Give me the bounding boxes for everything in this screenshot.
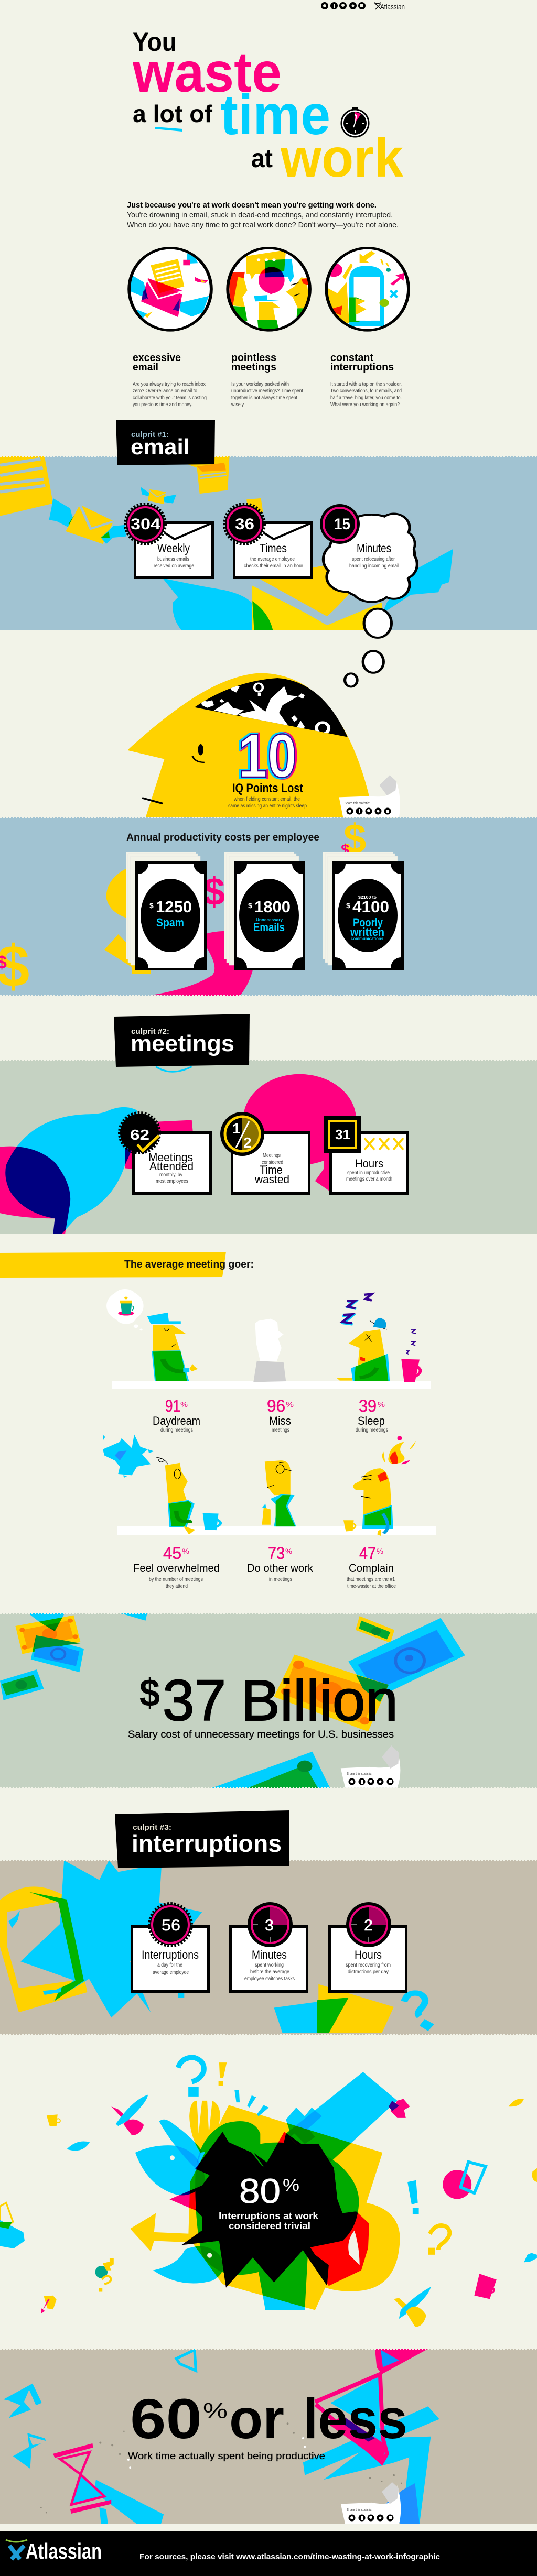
big number 10: 10 [239, 722, 297, 791]
card: half of meetings time wasted: wasted [254, 1173, 289, 1186]
card: 3 minutes: 3 [265, 1917, 274, 1934]
banner: the average meeting goer: The average meeting goer: [124, 1259, 254, 1270]
card: half of meetings time wasted [220, 1112, 309, 1194]
big number: 60 percent or less [130, 2387, 407, 2450]
illustration: 80 percent interruption explosion [0, 2057, 537, 2327]
card: 62 meetings attended: Attended [149, 1160, 194, 1173]
column: constant interruptions: What were you working on again? [330, 402, 400, 408]
stat: 47 percent complain [347, 1544, 396, 1589]
bill stack: $1250 spam: Spam [156, 916, 184, 929]
card: 36 times [224, 504, 312, 577]
stat: 73 percent do other work: 73 [268, 1544, 285, 1563]
character: overwhelmed [103, 1435, 220, 1535]
bill stack: $1800 emails: Unnecessary [256, 918, 283, 922]
stat: 96 percent miss: Miss [269, 1414, 291, 1427]
card: 56 interruptions: a day for the [157, 1962, 182, 1968]
callout: 80 percent: Interruptions at work [219, 2211, 319, 2221]
bill stack: $1800 emails: Emails [253, 921, 285, 934]
card: half of meetings time wasted: 2 [243, 1134, 252, 1151]
callout: 80 percent: 80 [239, 2171, 281, 2210]
card: 3 minutes: employee switches tasks [244, 1976, 295, 1982]
stat: 91 percent daydream: during meetings [160, 1427, 193, 1433]
illustration: flying envelopes [0, 456, 453, 630]
bill stack: $4100 poorly written: 4100 [352, 898, 389, 916]
title: waste [132, 40, 282, 104]
card: half of meetings time wasted: considered [262, 1160, 283, 1165]
column: pointless meetings: wisely [231, 402, 244, 408]
stat: 91 percent daydream: 91 [165, 1396, 180, 1415]
stat: 73 percent do other work: in meetings [269, 1577, 292, 1582]
top bar: social icons and logo: Atlassian [380, 3, 405, 12]
share tab: 60 percent [341, 2482, 401, 2524]
culprit 1 badge: culprit #1: [131, 430, 169, 439]
stat: 96 percent miss: 96 [267, 1396, 285, 1415]
illustration: dollar signs: $ [341, 842, 350, 859]
card: 31 hours: spent in unproductive [347, 1170, 390, 1176]
character: sleeper [336, 1294, 420, 1382]
bill stack: $4100 poorly written: $ [346, 901, 350, 910]
stat: 73 percent do other work: % [285, 1547, 292, 1555]
title: time [220, 83, 330, 146]
big number 10: 10 [238, 722, 297, 791]
big number: 60 percent or less: or [229, 2387, 284, 2450]
stat: 96 percent miss [267, 1396, 294, 1433]
icon: stopwatch [341, 107, 369, 137]
share tab: $37 billion: Share this statistic: [347, 1772, 372, 1776]
column: pointless meetings: together is not always time spent [231, 395, 297, 401]
heading: Annual productivity costs per employee [126, 832, 319, 843]
intro text: Just because you're at work doesn't mean you're getting work done. [127, 201, 377, 210]
illustration: speech bubbles [0, 1067, 356, 1234]
bill stack: $1800 emails: $ [248, 901, 252, 910]
card: 2 hours [329, 1902, 406, 1991]
small scattered icons [0, 2057, 537, 2327]
panel: meetings band [0, 1060, 537, 1234]
illustration: flying bills [0, 1612, 465, 1789]
stat: 39 percent sleep: during meetings [356, 1427, 388, 1433]
card: 2 hours: spent recovering from [346, 1962, 391, 1968]
thought cloud: 15 minutes: spent refocusing after [352, 556, 395, 562]
banner: the average meeting goer [0, 1252, 254, 1278]
bill stack: $4100 poorly written: written [350, 925, 384, 938]
illustration: dollar signs: $ [203, 870, 225, 913]
big number 10: 10 [237, 722, 296, 791]
card: 36 times: Times [260, 541, 287, 555]
card: 62 meetings attended: monthly, by [159, 1172, 182, 1178]
bill stack: $4100 poorly written: communications [351, 936, 384, 941]
share tab: $37 billion [341, 1745, 400, 1788]
illustration: yellow head with stars: same as missing an entire night's sleep [228, 803, 307, 809]
top bar: social icons and logo [321, 2, 405, 12]
column: pointless meetings: meetings [231, 362, 276, 373]
card: 3 minutes: Minutes [252, 1948, 287, 1961]
column: excessive email: excessive [133, 352, 181, 364]
bill stack: $1800 emails [224, 852, 305, 970]
card: 304 weekly emails: business emails [157, 556, 189, 562]
card: 56 interruptions [132, 1904, 209, 1991]
footer: Atlassian [26, 2539, 102, 2563]
intro text: You're drowning in email, stuck in dead-end meetings, and constantly interrupted. [127, 211, 393, 220]
card: half of meetings time wasted: 1 [232, 1120, 241, 1137]
column: pointless meetings: pointless [231, 352, 276, 364]
character: complainer [343, 1436, 416, 1536]
title [132, 27, 403, 189]
column: excessive email: email [133, 362, 158, 373]
illustration: yellow head with stars [127, 673, 374, 817]
illustration: dollar signs [0, 815, 366, 999]
share tab: 60 percent: Share this statistic: [347, 2508, 372, 2512]
culprit 1 badge: email [131, 434, 190, 459]
title: work [280, 128, 403, 189]
illustration: dollar signs: $ [343, 815, 366, 861]
card: 304 weekly emails: received on average [154, 563, 194, 569]
intro text: When do you have any time to get real work done? Don't worry—you're not alone. [127, 221, 399, 230]
bill stack: $1250 spam [126, 852, 207, 970]
card: 31 hours: 31 [335, 1127, 350, 1142]
column: pointless meetings: Is your workday packed with [231, 381, 289, 387]
bill stack: $4100 poorly written: $2100 to [358, 894, 377, 900]
card: 31 hours [324, 1116, 408, 1194]
title: at [251, 144, 273, 173]
panel: email band [0, 456, 537, 630]
footer [0, 2531, 537, 2576]
column: constant interruptions: Two conversations, four emails, and [330, 388, 402, 394]
illustration: yellow head with stars: IQ Points Lost [232, 781, 303, 795]
stat: 47 percent complain: time-waster at the office [347, 1584, 396, 1589]
stat: 45 percent feel overwhelmed: Feel overwhelmed [133, 1562, 220, 1575]
card: 2 hours: 2 [364, 1917, 373, 1934]
card: 3 minutes: before the average [250, 1969, 289, 1975]
card: 56 interruptions: 56 [162, 1917, 180, 1934]
icon: atlassian logo [6, 2540, 27, 2559]
character: daydreamer [106, 1289, 198, 1381]
shelf row 1 [112, 1381, 431, 1389]
stat: 39 percent sleep: % [378, 1400, 385, 1409]
column: excessive email: zero? Over-reliance on email to [133, 388, 197, 394]
culprit 3 badge [115, 1810, 289, 1868]
card: 31 hours: meetings over a month [346, 1176, 392, 1182]
bill stack: $1250 spam: 1250 [156, 898, 192, 916]
big number: 60 percent or less: % [203, 2398, 228, 2423]
column: pointless meetings: unproductive meetings? Time spent [231, 388, 303, 394]
card: 304 weekly emails: 304 [131, 516, 160, 533]
bill stack: $1250 spam: $ [149, 901, 154, 910]
stat: 91 percent daydream [153, 1396, 200, 1433]
stat: 47 percent complain: % [377, 1547, 383, 1555]
stat: 47 percent complain: that meetings are the #1 [347, 1577, 395, 1582]
title: You [133, 27, 177, 57]
title: a lot of [133, 100, 213, 127]
culprit 1 badge [116, 420, 215, 465]
card: 36 times: the average employee [250, 556, 295, 562]
illustration: yellow head with stars: when fielding constant email, the [233, 796, 300, 802]
thought cloud: 15 minutes: handling incoming email [349, 563, 399, 569]
icon circle: pointless meetings [226, 248, 310, 332]
stat: 73 percent do other work [247, 1544, 314, 1582]
card: 36 times: 36 [235, 516, 254, 533]
icon circle: constant interruptions [325, 248, 409, 330]
callout: 80 percent: % [283, 2176, 299, 2195]
card: 62 meetings attended: Meetings [148, 1151, 193, 1164]
column: constant interruptions: constant [330, 352, 373, 364]
stat: 39 percent sleep: Sleep [358, 1414, 385, 1427]
black burst [181, 2134, 356, 2288]
stat: 45 percent feel overwhelmed: they attend [166, 1584, 188, 1589]
stat: 73 percent do other work: Do other work [247, 1562, 314, 1575]
culprit 2 badge: meetings [131, 1031, 234, 1056]
stat: 45 percent feel overwhelmed: 45 [163, 1544, 181, 1563]
thought cloud: 15 minutes: Minutes [357, 541, 391, 555]
big number [139, 1668, 398, 1733]
big number: $ [139, 1671, 160, 1715]
stat: 91 percent daydream: % [180, 1400, 188, 1409]
icon circle: excessive email [128, 248, 211, 330]
panel: $37 billion band [0, 1612, 537, 1789]
big number: 60 percent or less: less [303, 2387, 407, 2450]
intro text [127, 201, 399, 230]
column: excessive email: Are you always trying to reach inbox [133, 381, 206, 387]
column: excessive email [133, 352, 207, 408]
stat: 47 percent complain: 47 [359, 1544, 376, 1563]
column: excessive email: collaborate with your team is costing [133, 395, 207, 401]
thought cloud: 15 minutes: 15 [334, 516, 350, 533]
character: missing person [253, 1319, 286, 1382]
stat: 45 percent feel overwhelmed: by the number of meetings [149, 1577, 203, 1582]
big number: 60 percent or less: 60 [130, 2387, 202, 2450]
stat: 39 percent sleep [356, 1396, 388, 1433]
stat: 45 percent feel overwhelmed: % [182, 1547, 189, 1555]
bill stack: $1800 emails: 1800 [254, 898, 291, 916]
card: 62 meetings attended: most employees [156, 1178, 188, 1184]
stat: 39 percent sleep: 39 [359, 1396, 377, 1415]
panel: $37 billion band: Salary cost of unnecessary meetings for U.S. businesses [128, 1729, 394, 1740]
character: doing other work [262, 1460, 296, 1526]
culprit 2 badge: culprit #2: [131, 1027, 169, 1036]
card: 56 interruptions: Interruptions [142, 1948, 199, 1961]
stat: 91 percent daydream: Daydream [153, 1414, 200, 1427]
panel: interruptions band [0, 1860, 537, 2035]
shelf row 2 [117, 1526, 436, 1535]
card: 62 meetings attended: 62 [130, 1127, 149, 1143]
panel: 60 percent or less band [0, 2349, 537, 2524]
culprit 3 badge: culprit #3: [133, 1823, 171, 1832]
share tab: 10 IQ points: Share this statistic: [345, 802, 370, 805]
big number: 37 [163, 1668, 226, 1733]
card: half of meetings time wasted: Time [260, 1163, 283, 1176]
card: 2 hours: distractions per day [348, 1969, 389, 1975]
stat: 96 percent miss: % [286, 1400, 294, 1409]
card: 62 meetings attended [120, 1113, 211, 1194]
card: 56 interruptions: average employee [153, 1970, 189, 1975]
card: 304 weekly emails [125, 504, 213, 577]
panel: 60 percent or less band: Work time actually spent being productive [128, 2451, 325, 2461]
callout: 80 percent [219, 2171, 319, 2231]
footer: For sources, please visit www.atlassian.com/time-wasting-at-work-infographic [139, 2552, 440, 2561]
card: 2 hours: Hours [355, 1948, 382, 1961]
column: constant interruptions: half a travel blog later, you come to. [330, 395, 402, 401]
thought cloud: 15 minutes [320, 504, 418, 687]
card: 3 minutes [231, 1902, 307, 1991]
stat: 47 percent complain: Complain [349, 1562, 394, 1575]
column: constant interruptions: interruptions [330, 362, 394, 373]
card: 31 hours: Hours [355, 1157, 383, 1170]
illustration: hourglasses [4, 2349, 439, 2524]
card: half of meetings time wasted: Meetings [263, 1153, 281, 1159]
card: 3 minutes: spent working [255, 1962, 284, 1968]
column: constant interruptions [330, 352, 402, 408]
column: excessive email: you precious time and money. [133, 402, 192, 408]
bill stack: $4100 poorly written: Poorly [353, 916, 383, 929]
big overlapping shapes [130, 2072, 400, 2310]
illustration: phone and burst [0, 1860, 434, 2033]
culprit 3 badge: interruptions [132, 1830, 282, 1857]
share tab: 10 IQ points [339, 775, 400, 817]
stat: 45 percent feel overwhelmed [133, 1544, 220, 1589]
stat: 96 percent miss: meetings [272, 1427, 289, 1433]
bill stack: $4100 poorly written [323, 852, 404, 970]
big number: Billion [241, 1668, 398, 1733]
panel: annual productivity costs band [0, 815, 537, 999]
column: pointless meetings [231, 352, 303, 408]
column: constant interruptions: It started with a tap on the shoulder. [330, 381, 402, 387]
callout: 80 percent: considered trivial [229, 2221, 310, 2231]
card: 36 times: checks their email in an hour [244, 563, 304, 569]
card: 304 weekly emails: Weekly [157, 541, 190, 555]
culprit 2 badge [114, 1014, 250, 1067]
